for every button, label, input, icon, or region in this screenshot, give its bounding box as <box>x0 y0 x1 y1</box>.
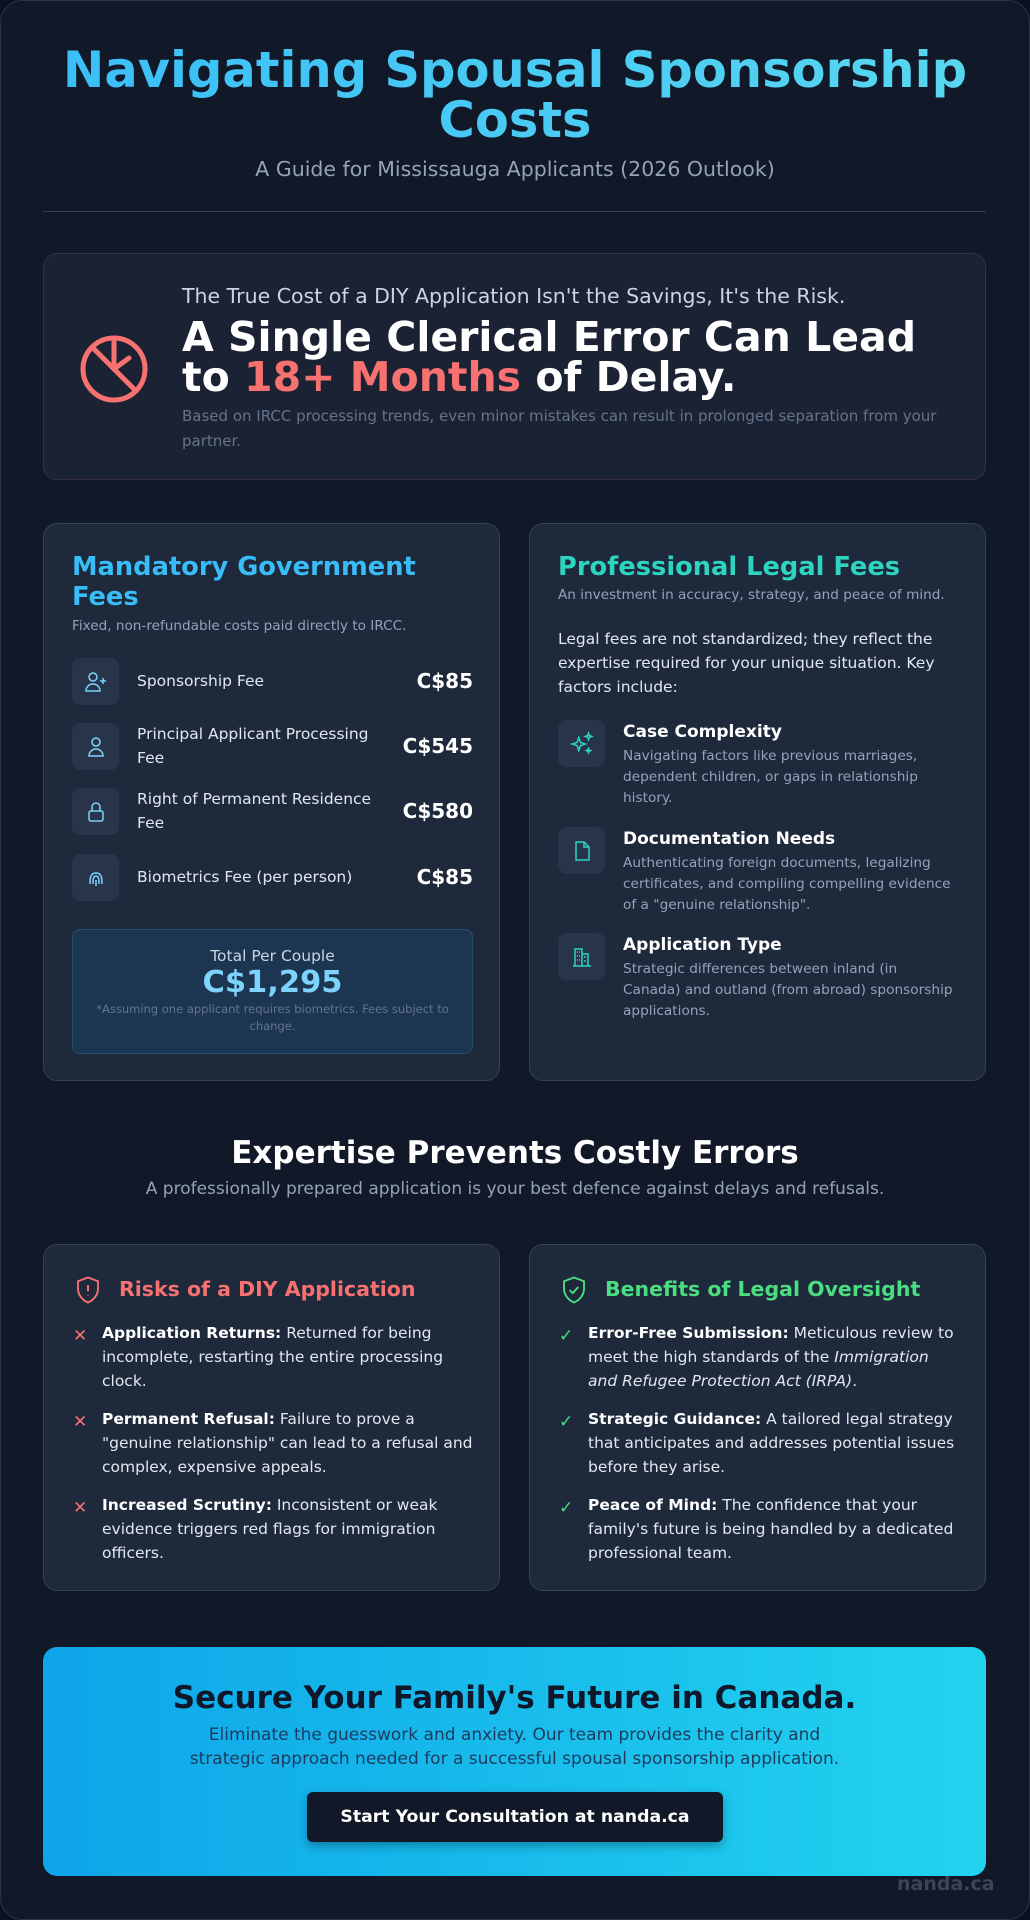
heading with shield check icon: Benefits of Legal Oversight <box>605 1277 920 1301</box>
panel: benefits <box>529 1244 986 1591</box>
row: biometrics <box>72 854 473 901</box>
panel: risks <box>43 1244 500 1591</box>
heading: Professional Legal Fees <box>558 552 900 582</box>
title: Navigating Spousal Sponsorship <box>63 41 967 99</box>
row: sponsorship: Sponsorship Fee <box>137 672 264 690</box>
title <box>0 45 1030 145</box>
panel: legal fees <box>529 523 986 1081</box>
CTA button <box>307 1792 723 1842</box>
row: principal <box>72 723 473 770</box>
row: right of PR: C$580 <box>403 799 473 823</box>
risk 3: Increased Scrutiny: Inconsistent or weak evidence triggers red flags for immigration officers. <box>102 1496 437 1562</box>
risk 2: Permanent Refusal: Failure to prove a "genuine relationship" can lead to a refusal and complex, expensive appeals. <box>102 1410 473 1476</box>
benefit 3: Peace of Mind: The confidence that your family's future is being handled by a dedicated professional team. <box>588 1496 953 1562</box>
CTA heading: Secure Your Family's Future in Canada. <box>173 1680 856 1716</box>
benefit 2: Strategic Guidance: A tailored legal strategy that anticipates and addresses potential issues before they arise. <box>588 1410 954 1476</box>
factor: application type: Application Type <box>623 935 782 955</box>
benefit 3: ✓ <box>559 1498 573 1518</box>
row: biometrics: Biometrics Fee (per person) <box>137 868 352 886</box>
section heading: Expertise Prevents Costly Errors <box>231 1135 799 1171</box>
panel: government fees: Fixed, non-refundable costs paid directly to IRCC. <box>72 618 406 634</box>
factor: application type <box>558 933 953 1019</box>
risk 1: Application Returns: Returned for being incomplete, restarting the entire processing clock. <box>102 1324 443 1390</box>
total box: Total Per Couple <box>210 947 335 965</box>
row: right of PR: Right of Permanent Residence Fee <box>137 790 371 832</box>
title: Costs <box>439 91 591 149</box>
alert headline: A Single Clerical Error Can Lead <box>182 313 916 361</box>
alert headline: to 18+ Months of Delay. <box>182 353 736 401</box>
total box: C$1,295 <box>202 965 343 1000</box>
factor: case complexity: Navigating factors like previous marriages, dependent children, or gaps in relationship history. <box>623 748 918 806</box>
heading with shield icon: Risks of a DIY Application <box>119 1277 415 1301</box>
factor: documentation: Documentation Needs <box>623 829 835 849</box>
panel: legal fees: An investment in accuracy, strategy, and peace of mind. <box>558 587 945 603</box>
row: biometrics: C$85 <box>417 865 473 889</box>
alert note: Based on IRCC processing trends, even minor mistakes can result in prolonged separation from your partner. <box>182 407 936 450</box>
footer brand: nanda.ca <box>897 1873 995 1895</box>
total box <box>72 929 473 1054</box>
factor: case complexity: Case Complexity <box>623 722 782 742</box>
panel: call to action <box>43 1647 986 1876</box>
factor: documentation <box>558 827 951 913</box>
row: right of PR <box>72 788 473 835</box>
risk 2: ✕ <box>73 1412 87 1432</box>
alert kicker: The True Cost of a DIY Application Isn't the Savings, It's the Risk. <box>182 284 845 308</box>
section subtitle: A professionally prepared application is your best defence against delays and refusals. <box>146 1179 884 1199</box>
CTA button: Start Your Consultation at nanda.ca <box>340 1807 690 1827</box>
benefit 1: ✓ <box>559 1326 573 1346</box>
row: sponsorship: C$85 <box>417 669 473 693</box>
benefit 2: ✓ <box>559 1412 573 1432</box>
subtitle: A Guide for Mississauga Applicants (2026 Outlook) <box>255 157 775 181</box>
heading <box>72 552 416 612</box>
factor: application type: Strategic differences between inland (in Canada) and outland (from abroad) sponsorship applications. <box>623 961 953 1019</box>
factor: case complexity <box>558 720 918 806</box>
total box: *Assuming one applicant requires biometrics. Fees subject to change. <box>96 1002 449 1033</box>
row: principal: Principal Applicant Processing Fee <box>137 725 368 767</box>
risk 1: ✕ <box>73 1326 87 1346</box>
row: principal: C$545 <box>403 734 473 758</box>
factor: documentation: Authenticating foreign documents, legalizing certificates, and compiling compelling evidence of a "genuine relationship". <box>623 855 951 913</box>
panel: government fees <box>43 523 500 1081</box>
heading: Mandatory Government <box>72 552 416 582</box>
intro text: Legal fees are not standardized; they reflect the expertise required for your unique situation. Key factors include: <box>558 630 935 696</box>
heading: Fees <box>72 582 139 612</box>
row: sponsorship <box>72 658 473 705</box>
benefit 1: Error-Free Submission: Meticulous review to meet the high standards of the Immigration and Refugee Protection Act (IRPA). <box>588 1324 954 1390</box>
risk 3: ✕ <box>73 1498 87 1518</box>
icon: prohibited <box>80 336 148 402</box>
CTA text: Eliminate the guesswork and anxiety. Our team provides the clarity and strategic approach needed for a successful spousal sponsorship application. <box>190 1725 839 1769</box>
panel: risk alert <box>43 253 986 480</box>
alert headline <box>182 313 916 401</box>
